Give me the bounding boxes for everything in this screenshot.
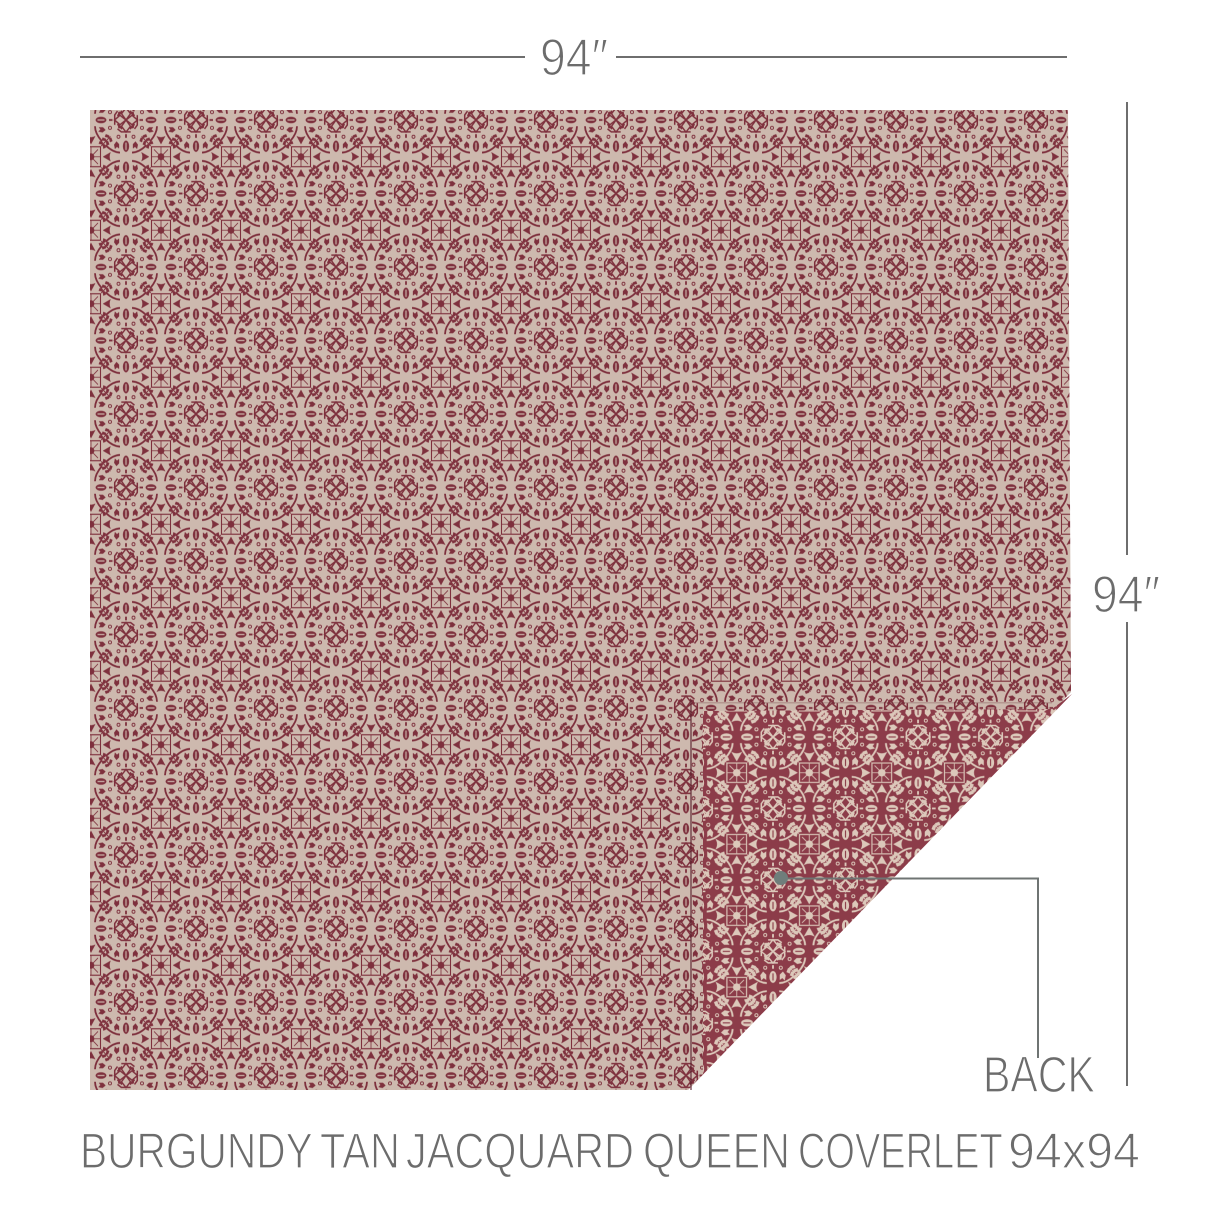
front fabric pattern [90,110,1071,1090]
top dimension label: 94″ [540,29,608,87]
right dimension line lower [1126,622,1128,1086]
back fabric pattern [688,694,1072,1090]
callout label: BACK [983,1046,1095,1103]
callout leader line [781,878,1038,1058]
title: JACQUARD [406,1123,634,1179]
callout: back [774,871,1095,1103]
fold crease left [690,700,692,1090]
callout dot [774,871,788,885]
top dimension line right [616,56,1067,58]
right dimension label: 94″ [1092,566,1160,624]
right dimension line upper [1126,102,1128,555]
folded back corner [688,694,1072,1090]
title: BURGUNDY [80,1123,312,1179]
fold hem top [692,702,1052,704]
title: COVERLET [798,1123,1002,1179]
title: TAN [320,1123,400,1179]
panel: coverlet [90,110,1072,1090]
top dimension line left [80,56,525,58]
fold band left [688,703,703,1090]
title: QUEEN [643,1123,790,1179]
title: 94x94 [1008,1123,1140,1179]
